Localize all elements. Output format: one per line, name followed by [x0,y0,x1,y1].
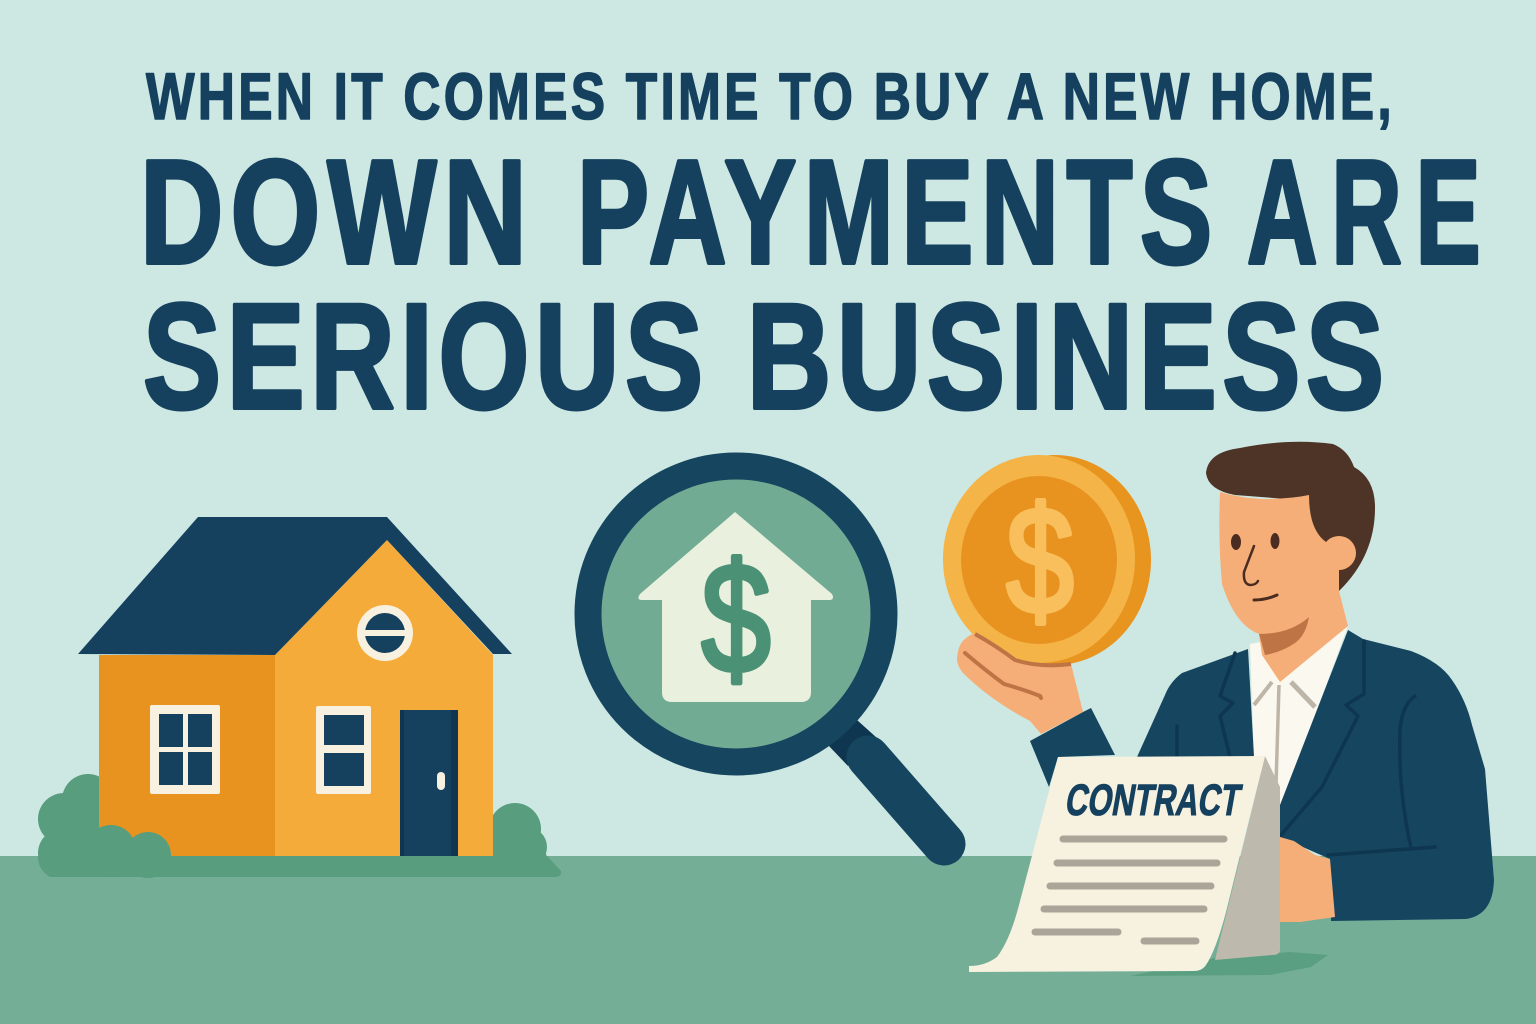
sleeve [1030,708,1115,787]
contract lines [1035,839,1224,941]
lower hand [1280,837,1335,922]
ground [0,856,1536,1024]
jacket left [1137,649,1254,757]
title line 2: DOWN [140,130,527,295]
paper [969,756,1265,972]
shirt [1250,626,1348,810]
icon: coin [943,455,1151,665]
title [140,59,1481,440]
left window [150,705,220,794]
title line 3: SERIOUS BUSINESS [143,272,1384,440]
house with dollar [638,512,833,705]
neck shadow [1259,617,1309,655]
collar lines [1254,682,1315,785]
hand holding coin [957,634,1083,734]
paper fold [1215,756,1280,960]
coin dollar sign: $ [1006,476,1074,646]
title line 2: ARE [1247,128,1481,295]
contract [969,756,1328,976]
handle [868,757,944,844]
right window [316,706,371,794]
round attic window [357,605,413,661]
icon: magnifying glass [588,466,944,844]
contract label: CONTRACT [1062,776,1245,825]
back bushes [38,774,561,877]
face and neck [1219,492,1348,682]
suit detail lines [1177,641,1435,855]
roof [78,517,512,655]
person [1030,442,1494,922]
hair [1206,442,1375,591]
face details [1231,533,1280,600]
dollar sign: $ [701,531,771,705]
house left wall [99,655,275,856]
lens [588,466,884,762]
ear [1322,536,1356,570]
icon: house [38,517,561,878]
title line 2: PAYMENTS [577,130,1212,295]
door [400,710,458,856]
house right wall [275,540,493,856]
title line 2 [140,128,1481,295]
title line 1: WHEN IT COMES TIME TO BUY A NEW HOME, [146,59,1392,133]
paper shadow [1130,952,1328,976]
jacket right [1280,630,1494,921]
front bushes [86,825,171,878]
neck [828,720,877,766]
